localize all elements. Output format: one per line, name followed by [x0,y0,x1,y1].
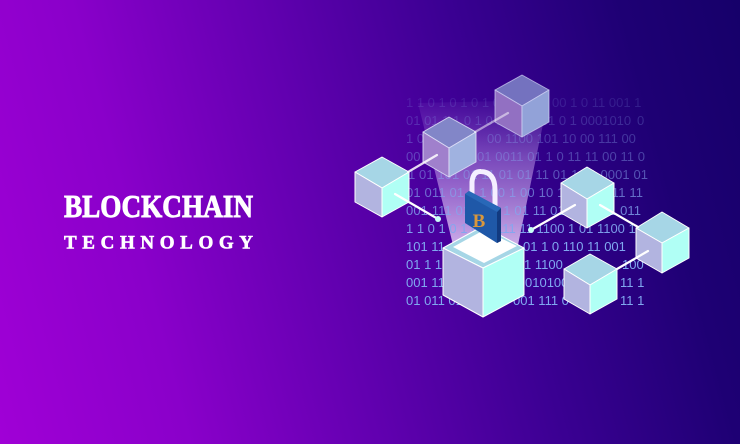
cube: right far [636,212,689,273]
binary code background: 001 111 01 1 01 1 01 11 01 01 1 0 1 011 [406,203,641,218]
binary code background: 01 011 01 [406,293,463,308]
binary code background: 001 111 0 [513,293,569,308]
padlock body [465,191,501,243]
binary code background: 1 01 101 01 11 01 01 11 01 1 01 0001 01 [408,167,648,182]
cube: middle faded [423,117,476,177]
cube: top faded [495,75,549,137]
binary code background: 01 011 01 1 1 00 1 00 10 11 01 01 11 11 [406,185,643,200]
cube: right lower [564,254,617,314]
binary code background: 00 1 0 11 001 1 [552,95,641,110]
binary code background: 00 1100 101 10 00 111 00 [487,131,636,146]
binary code background: 01 1 0 110 11 001 [523,239,626,254]
heading: technology: TECHNOLOGY [64,232,253,254]
binary code background: 010100 [525,275,568,290]
binary code background [406,95,648,308]
cube: left [355,157,409,217]
heading: blockchain: BLOCKCHAIN [64,188,253,224]
binary code background: 1 1 0 1 0 1 0 1 0 1 0 1 [406,95,532,110]
binary code background: 1 0 [406,131,424,146]
main cube [443,226,524,317]
binary code background: 11 1 [620,275,644,290]
binary code background: 001 11 [406,275,445,290]
binary code background: 1 1100 [524,257,563,272]
binary code background: 11 1 [620,293,644,308]
binary code background: 101 11 [406,239,445,254]
icon: bitcoin padlock [465,171,501,243]
binary code background: 01 01 1 1 0 1 0 1 0 1 0 1 [406,113,547,128]
binary code background: 01 1 1 [406,257,442,272]
light beam [418,100,548,245]
binary code background: 1 1 0 1 0 1 0 1 [406,221,489,236]
binary code background: 01 0011 01 1 0 11 11 00 11 0 [477,149,645,164]
binary code background: 100 [622,257,644,272]
binary code background: 00 [406,149,420,164]
binary code background: 1 0 1 0001010 [548,113,631,128]
binary code background: 0 [637,113,644,128]
bitcoin symbol: B [473,211,486,232]
binary code background: 111 11 1100 1 01 1100 1 [496,221,636,236]
title [64,188,253,254]
connector node left [435,216,441,222]
cube: right upper [561,167,614,228]
connector node right [528,227,534,233]
connector lines [395,113,648,269]
padlock shackle [472,171,495,209]
